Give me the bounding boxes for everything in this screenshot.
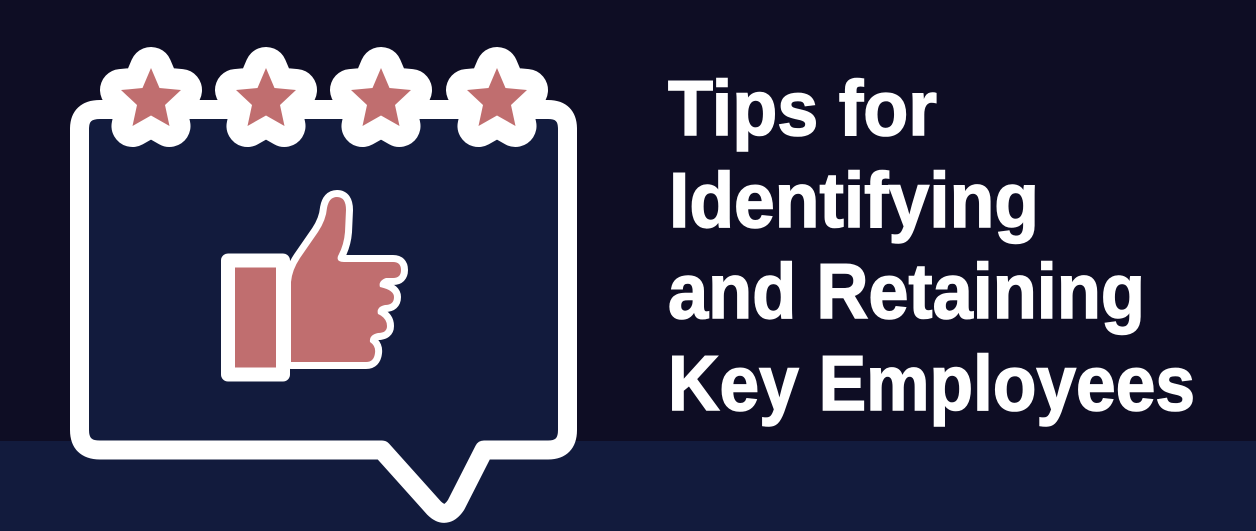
star 2 [236, 68, 296, 126]
title: and Retaining [668, 247, 1145, 335]
star 4 [467, 68, 527, 126]
title: Identifying [669, 156, 1039, 244]
title: Key Employees [668, 339, 1195, 427]
stars rating [121, 68, 527, 126]
star 1 [121, 68, 181, 126]
star 3 [351, 68, 411, 126]
speech bubble [80, 110, 568, 513]
icon: thumbs up [228, 197, 401, 374]
title [668, 64, 1195, 427]
title: Tips for [668, 64, 937, 152]
